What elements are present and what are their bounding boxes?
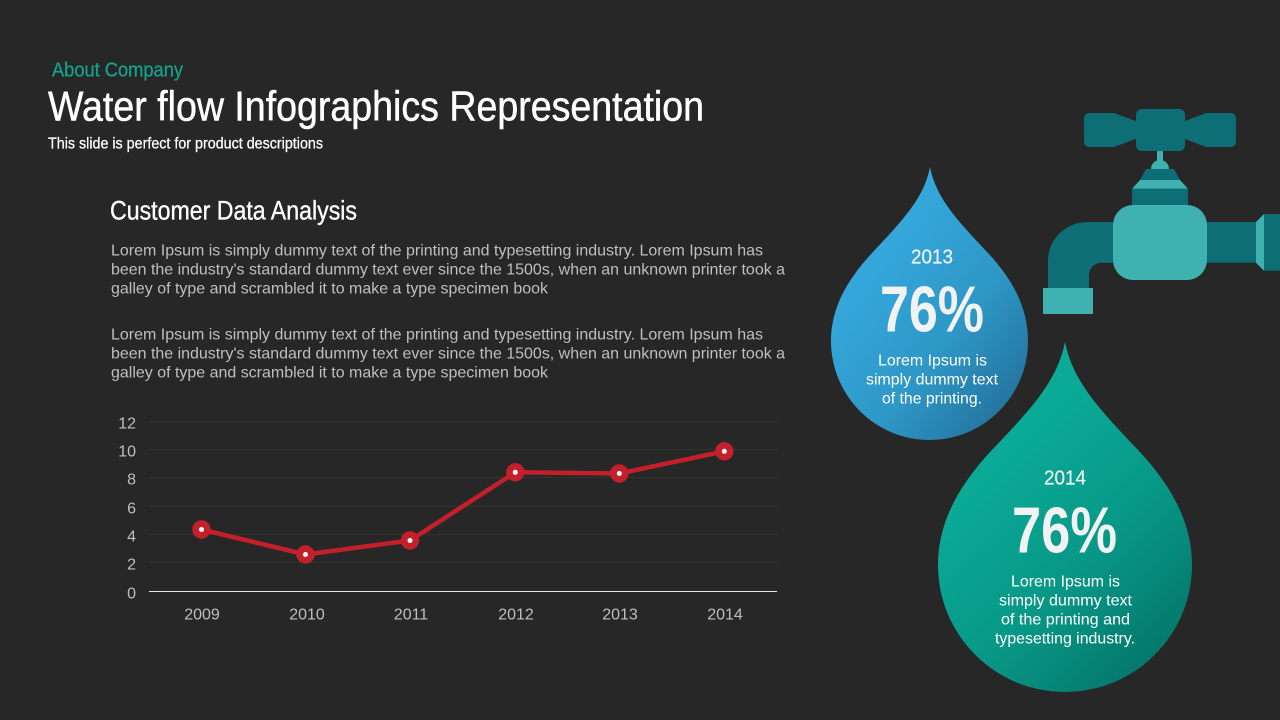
eyebrow: About Company: About Company <box>52 58 184 82</box>
x axis labels: 2009 <box>184 606 220 624</box>
value 76%: 76% <box>1012 494 1117 566</box>
title: Water flow Infographics Representation <box>48 82 704 130</box>
description 2014: Lorem Ipsum is <box>1011 574 1120 590</box>
description 2013: of the printing. <box>882 390 982 408</box>
year 2014: 2014 <box>1044 468 1086 490</box>
y axis labels: 12 <box>118 416 136 432</box>
subtitle: This slide is perfect for product descriptions <box>48 136 323 152</box>
x axis labels <box>184 606 743 624</box>
x axis labels: 2010 <box>289 606 325 624</box>
value 76%: 76% <box>880 272 984 346</box>
x axis labels: 2012 <box>498 606 534 624</box>
y axis labels: 8 <box>127 472 136 488</box>
data line <box>202 451 724 554</box>
paragraph 2: galley of type and scrambled it to make a type specimen book <box>111 364 549 382</box>
description 2014: simply dummy text <box>999 592 1133 610</box>
x axis labels: 2014 <box>707 606 743 624</box>
paragraph 2: Lorem Ipsum is simply dummy text of the printing and typesetting industry. Lorem Ipsum has <box>111 326 763 344</box>
paragraph 1: galley of type and scrambled it to make a type specimen book <box>111 280 549 298</box>
x axis labels: 2011 <box>394 606 428 624</box>
data markers <box>192 442 734 564</box>
icon: water tap <box>1043 109 1280 314</box>
line chart <box>118 416 777 624</box>
description 2014 <box>995 574 1135 648</box>
drop: 2014 <box>938 342 1192 692</box>
y axis labels <box>118 416 136 602</box>
x axis labels: 2013 <box>602 606 638 624</box>
description 2013: Lorem Ipsum is <box>878 352 987 370</box>
y axis labels: 10 <box>118 444 136 460</box>
description 2013 <box>866 352 999 408</box>
y axis labels: 4 <box>127 528 136 546</box>
year 2013: 2013 <box>911 246 953 268</box>
y axis labels: 2 <box>127 556 136 574</box>
paragraph 1: Lorem Ipsum is simply dummy text of the printing and typesetting industry. Lorem Ipsum has <box>111 242 763 260</box>
description 2013: simply dummy text <box>866 372 999 388</box>
description 2014: typesetting industry. <box>995 630 1135 648</box>
section heading: Customer Data Analysis: Customer Data Analysis <box>110 196 357 226</box>
paragraph 2 <box>111 326 785 382</box>
description 2014: of the printing and <box>1001 612 1130 628</box>
paragraph 1: been the industry's standard dummy text ever since the 1500s, when an unknown printer took a <box>111 262 785 278</box>
y axis labels: 6 <box>127 500 136 518</box>
drop: 2013 <box>831 167 1028 440</box>
paragraph 1 <box>111 242 785 298</box>
y axis labels: 0 <box>127 586 136 602</box>
paragraph 2: been the industry's standard dummy text ever since the 1500s, when an unknown printer took a <box>111 346 785 362</box>
